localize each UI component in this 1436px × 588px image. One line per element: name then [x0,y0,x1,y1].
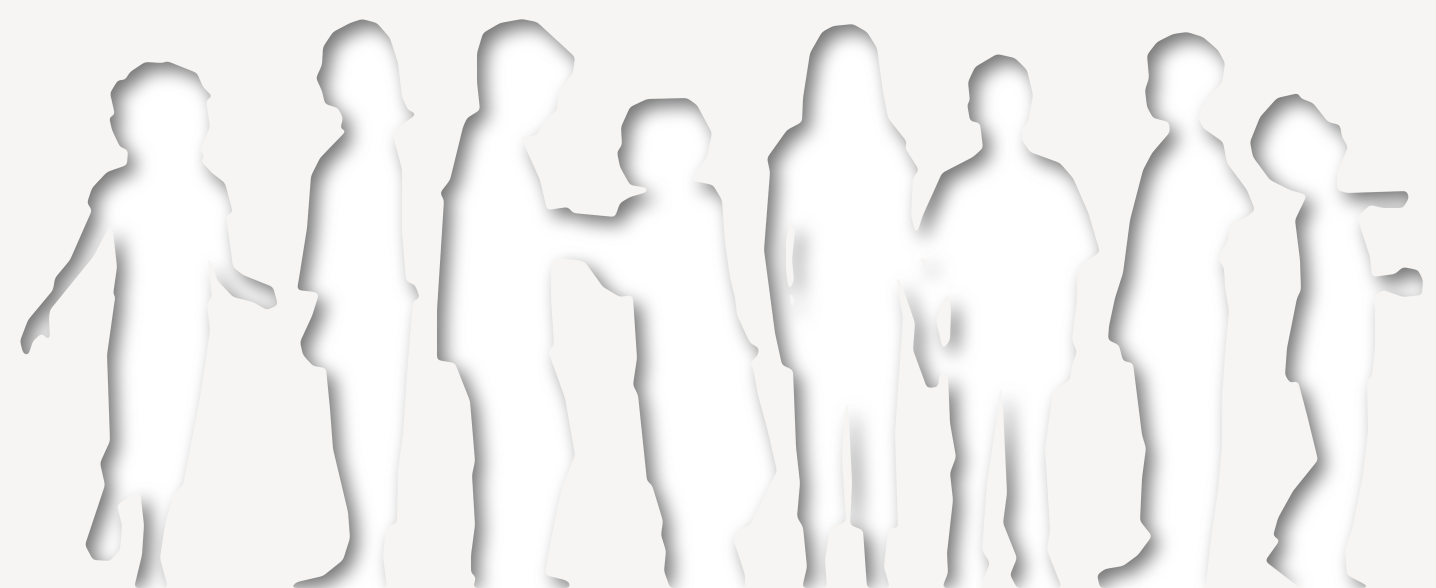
silhouette: small child with arms out [1250,93,1423,588]
silhouette: running girl with curly hair [20,61,278,588]
silhouette: long-haired girl holding hands with boy in t-shirt [764,24,1100,588]
silhouette: boy in profile [1097,32,1255,588]
silhouette: tall boy reaching to a smaller boy [437,19,777,588]
silhouette: girl with shoulder-length hair [289,19,420,588]
